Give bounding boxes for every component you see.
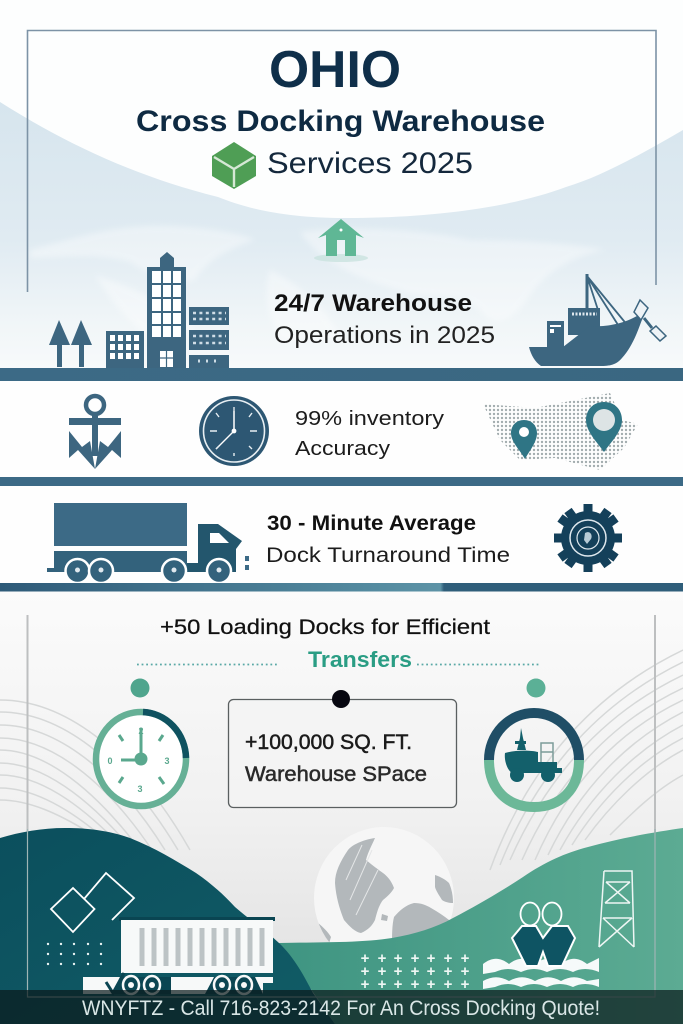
icon: left stopwatch	[96, 678, 186, 806]
plus grid: +	[461, 976, 470, 993]
icon: two figures	[512, 902, 575, 966]
icon: anchor	[69, 396, 121, 469]
hill: green	[279, 828, 683, 1024]
land: large continent	[335, 838, 394, 933]
hill: dark teal	[0, 828, 335, 1024]
plus grid: +	[444, 950, 453, 967]
plus grid: +	[427, 963, 436, 980]
icon: delivery truck	[47, 503, 249, 583]
icon: cargo ship	[529, 274, 666, 366]
icon: house	[314, 219, 368, 262]
icon: right ring with truck	[489, 678, 579, 807]
panel: lower background	[0, 592, 683, 1024]
icon: left stopwatch: 0	[107, 756, 113, 766]
plus grid: +	[461, 950, 470, 967]
icon: left stopwatch: 3	[164, 756, 170, 766]
black dot	[332, 690, 350, 708]
title frame	[28, 30, 656, 292]
icon: left stopwatch: 2	[138, 726, 144, 736]
island	[381, 914, 388, 921]
text: 99% inventory: 99% inventory	[295, 408, 444, 430]
icon: diamonds	[51, 873, 134, 932]
plus grid: +	[444, 963, 453, 980]
plus grid: +	[394, 950, 403, 967]
wheel wells	[112, 977, 263, 994]
plus grid: +	[461, 963, 470, 980]
tower	[147, 252, 186, 368]
icon: globe	[314, 838, 454, 942]
frame side lines	[28, 615, 655, 997]
plus grid: +	[427, 976, 436, 993]
heading: Services 2025: Services 2025	[267, 147, 473, 180]
land: eastern strip	[435, 875, 453, 903]
land: south west	[318, 924, 331, 942]
plus grid	[361, 950, 470, 993]
plus grid: +	[378, 963, 387, 980]
icon: wall clock	[199, 396, 269, 466]
dotted rules	[137, 664, 540, 666]
land: southern continent	[392, 903, 449, 938]
text: +50 Loading Docks for Efficient: +50 Loading Docks for Efficient	[160, 616, 490, 639]
plus grid: +	[411, 950, 420, 967]
plus grid: +	[361, 976, 370, 993]
icon: waves	[483, 958, 599, 989]
divider band 3	[0, 583, 683, 592]
text: 30 - Minute Average: 30 - Minute Average	[267, 512, 476, 535]
world map watermark	[30, 226, 605, 345]
icon: trees	[49, 320, 92, 367]
icon: city buildings	[106, 252, 229, 368]
panel: hero background	[0, 0, 683, 370]
heading: Cross Docking Warehouse: Cross Docking Warehouse	[136, 105, 545, 138]
plus grid: +	[394, 976, 403, 993]
footer bar	[0, 990, 683, 1024]
text: Accuracy: Accuracy	[295, 438, 390, 460]
plus grid: +	[411, 976, 420, 993]
footer text: WNYFTZ - Call 716-823-2142 For An Cross Docking Quote!	[82, 997, 600, 1020]
plus grid: +	[378, 976, 387, 993]
dot grid	[47, 943, 102, 965]
left building	[106, 331, 144, 368]
text: Dock Turnaround Time: Dock Turnaround Time	[266, 544, 510, 567]
plus grid: +	[444, 976, 453, 993]
divider band 1	[0, 368, 683, 381]
plus grid: +	[361, 950, 370, 967]
plus grid: +	[361, 963, 370, 980]
divider band 2	[0, 477, 683, 486]
text: Warehouse SPace: Warehouse SPace	[245, 763, 427, 786]
frame bottom and side overlay	[28, 829, 655, 997]
decorative wave lines	[0, 650, 683, 870]
text: Operations in 2025: Operations in 2025	[274, 322, 495, 349]
panel: accuracy row	[0, 381, 683, 477]
plus grid: +	[378, 950, 387, 967]
right building	[189, 307, 229, 368]
icon: green box	[212, 142, 256, 189]
icon: lattice tower	[599, 871, 634, 947]
text: 24/7 Warehouse: 24/7 Warehouse	[274, 290, 472, 317]
plus grid: +	[394, 963, 403, 980]
text: Transfers: Transfers	[308, 647, 412, 672]
text: +100,000 SQ. FT.: +100,000 SQ. FT.	[245, 731, 412, 754]
icon: container truck	[83, 917, 275, 994]
icon: left stopwatch: 3	[137, 784, 143, 794]
plus grid: +	[427, 950, 436, 967]
panel: turnaround row	[0, 486, 683, 583]
panel: warehouse space callout	[228, 690, 456, 808]
plus grid: +	[411, 963, 420, 980]
icon: dotted map with pins	[483, 393, 638, 470]
icon: gear	[554, 504, 622, 572]
title: OHIO: OHIO	[269, 41, 401, 99]
